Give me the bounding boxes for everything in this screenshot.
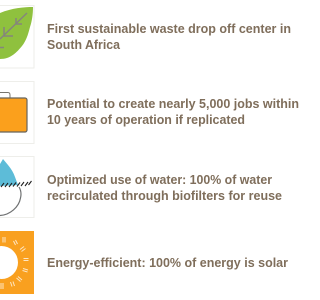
icon: water drop card: [0, 156, 34, 218]
text: optimized use of water: recirculated through biofilters for reuse: [47, 188, 282, 203]
text: potential jobs: [47, 96, 299, 127]
icon: green leaf card: [0, 6, 34, 68]
text: optimized use of water: [47, 172, 282, 203]
text: first sustainable waste drop off center: First sustainable waste drop off center in: [47, 21, 291, 36]
text: energy-efficient: Energy-efficient: 100% of energy is solar: [47, 255, 288, 270]
text: optimized use of water: Optimized use of water: 100% of water: [47, 172, 272, 187]
text: potential jobs: 10 years of operation if replicated: [47, 112, 245, 127]
icon: solar sun card: [0, 231, 34, 294]
text: first sustainable waste drop off center: South Africa: [47, 37, 121, 52]
text: first sustainable waste drop off center: [47, 21, 291, 52]
icon: orange briefcase card: [0, 82, 34, 144]
